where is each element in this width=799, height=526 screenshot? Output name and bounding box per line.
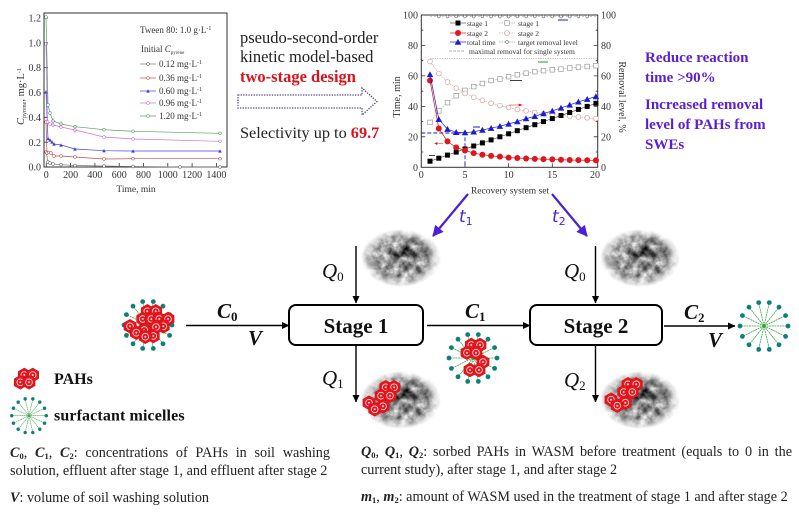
chart: pyrene concentration versus time: 0.4: [28, 113, 41, 124]
chart: pyrene concentration versus time: 1.20 mg·L: [159, 111, 197, 121]
chart: time and removal level versus recovery system set: target removal level: [518, 38, 578, 47]
chart: time and removal level versus recovery system set: 0: [413, 163, 418, 174]
chart: time and removal level versus recovery system set: 0: [601, 163, 606, 174]
legend: PAHs: PAHs: [54, 371, 93, 388]
flow labels: Q: [322, 366, 337, 390]
chart: pyrene concentration versus time: pyrene: [171, 51, 185, 56]
chart: pyrene concentration versus time: 1400: [206, 170, 226, 181]
image: sorbent with PAHs after stage 2: [600, 371, 680, 429]
chart: time and removal level versus recovery system set: Recovery system set: [471, 186, 549, 196]
text: two-stage design description: pseudo-second-order: [240, 28, 379, 47]
arrow: t1: [433, 194, 473, 236]
flow labels: 2: [579, 378, 586, 393]
chart: pyrene concentration versus time: -1: [17, 68, 23, 73]
flow labels: C: [465, 299, 479, 323]
chart: time and removal level versus recovery system set: 100: [403, 10, 418, 22]
chart: pyrene concentration versus time: 1.2: [28, 14, 41, 24]
chart: pyrene concentration versus time: 0.60 mg·L: [159, 86, 197, 96]
chart: pyrene concentration versus time: -1: [197, 112, 202, 118]
image: sorbent before stage 1: [361, 229, 441, 287]
text: definitions of Q: Q0, Q1, Q2: sorbed PAHs in WASM before treatment (equals to 0 in the current study), after stage 1, and after stage 2: [361, 444, 792, 478]
flow labels: V: [708, 328, 724, 352]
chart: time and removal level versus recovery system set: stage 1: [518, 19, 539, 28]
chart: time and removal level versus recovery system set: 5: [462, 170, 468, 181]
chart: time and removal level versus recovery system set: stage 2: [467, 29, 488, 38]
arrow: t2: [552, 194, 587, 236]
text: two-stage design description: [240, 28, 379, 142]
arrow: t1: t: [459, 207, 466, 227]
legend: surfactant micelles: surfactant micelles: [54, 408, 185, 424]
image: sorbent before stage 2: [600, 229, 680, 287]
chart: time and removal level versus recovery system set: 60: [601, 72, 611, 82]
chart: pyrene concentration versus time: 0.12 mg·L: [159, 59, 197, 69]
text: key results: time >90%: [645, 70, 716, 86]
chart: time and removal level versus recovery system set: 100: [601, 10, 616, 22]
box: Stage 2: Stage 2: [564, 314, 628, 338]
flow labels: Q: [564, 368, 579, 392]
legend: PAHs: [14, 368, 93, 389]
icon: clean micelle, final effluent: [738, 300, 790, 352]
chart: time and removal level versus recovery system set: 60: [408, 72, 418, 82]
flow labels: [217, 259, 724, 393]
chart: pyrene concentration versus time: Initial C: [141, 44, 171, 54]
chart: pyrene concentration versus time: 200: [63, 170, 78, 181]
chart: time and removal level versus recovery system set: 0: [419, 170, 424, 181]
text: two-stage design description: Selectivity up to 69.7: [240, 123, 379, 142]
flow labels: 1: [479, 309, 486, 324]
chart: pyrene concentration versus time: 400: [87, 170, 102, 181]
chart: pyrene concentration versus time: 0.0: [28, 162, 41, 174]
text: key results: [645, 50, 766, 153]
chart: pyrene concentration versus time: -1: [197, 99, 202, 105]
chart: time and removal level versus recovery system set: 80: [408, 41, 418, 52]
chart: pyrene concentration versus time: 0.2: [28, 138, 41, 149]
flow labels: C: [684, 300, 698, 324]
icon: micelle with remaining PAHs, stage 1 effluent: [447, 332, 499, 384]
flow labels: 2: [698, 310, 705, 325]
chart: pyrene concentration versus time: 1.0: [28, 38, 41, 50]
arrow: dotted block arrow: [238, 88, 377, 115]
text: definitions of C: C0, C1, C2: concentrations of PAHs in soil washing solution, effluent after stage 1, and effluent after stage 2: [10, 445, 330, 478]
chart: time and removal level versus recovery system set: 40: [408, 102, 418, 113]
text: two-stage design description: kinetic model-based: [240, 47, 374, 66]
flow labels: Q: [564, 259, 579, 283]
chart: time and removal level versus recovery system set: 20: [408, 132, 418, 144]
chart: pyrene concentration versus time: Time, min: [116, 185, 156, 195]
chart: pyrene concentration versus time: 0.36 mg·L: [159, 73, 197, 83]
flow labels: Q: [322, 259, 337, 283]
chart: pyrene concentration versus time: Tween 80: 1.0 g·L: [140, 25, 206, 35]
flow labels: 0: [337, 269, 344, 284]
chart: time and removal level versus recovery system set: Time, min: [392, 76, 403, 118]
chart: pyrene concentration versus time: 1200: [182, 170, 202, 181]
chart: pyrene concentration versus time: -1: [197, 74, 202, 80]
chart: pyrene concentration versus time: -1: [197, 60, 202, 66]
flow labels: C: [217, 299, 231, 323]
chart: time and removal level versus recovery system set: 20: [590, 170, 600, 181]
chart: time and removal level versus recovery system set: stage 2: [518, 29, 539, 38]
chart: pyrene concentration versus time: 0.8: [28, 63, 41, 74]
chart: time and removal level versus recovery system set: stage 1: [467, 19, 488, 28]
icon: micelle loaded with PAHs, influent: [122, 299, 174, 351]
chart: time and removal level versus recovery system set: 20: [601, 132, 611, 144]
chart: pyrene concentration versus time: -1: [206, 26, 211, 32]
text: definition of V: V: volume of soil washing solution: [10, 490, 209, 506]
arrow: t2: 2: [559, 215, 566, 228]
chart: pyrene concentration versus time: 0: [44, 170, 49, 181]
chart: time and removal level versus recovery system set: [392, 10, 627, 196]
chart: pyrene concentration versus time: -1: [197, 87, 202, 93]
text: definitions of m: m1, m2: amount of WASM used in the treatment of stage 1 and after stage 2: [361, 489, 788, 505]
flow labels: V: [248, 326, 264, 350]
chart: pyrene concentration versus time: 0.96 mg·L: [159, 98, 197, 108]
text: key results: level of PAHs from: [645, 117, 766, 133]
chart: pyrene concentration versus time: 1000: [158, 170, 178, 181]
chart: pyrene concentration versus time: C: [16, 117, 27, 125]
chart: pyrene concentration versus time: 600: [112, 170, 127, 181]
text: key results: Reduce reaction: [645, 50, 749, 66]
chart: time and removal level versus recovery system set: maximal removal for single system: [469, 47, 575, 56]
flow arrows: [186, 246, 735, 402]
box: Stage 1: [289, 305, 423, 345]
chart: pyrene concentration versus time: pyrene: [22, 101, 28, 118]
legend: surfactant micelles: [10, 397, 185, 434]
flow labels: 0: [579, 269, 586, 284]
chart: pyrene concentration versus time: , mg·L: [16, 73, 27, 102]
chart: pyrene concentration versus time: 0.6: [28, 88, 41, 99]
chart: pyrene concentration versus time: [16, 13, 227, 195]
text: key results: Increased removal: [645, 97, 763, 113]
chart: time and removal level versus recovery system set: 80: [601, 41, 611, 52]
flow labels: 1: [337, 376, 344, 391]
image: sorbent with PAHs after stage 1: [361, 371, 441, 429]
box: Stage 1: Stage 1: [324, 314, 388, 338]
chart: time and removal level versus recovery system set: 15: [547, 170, 557, 181]
flow labels: 0: [231, 309, 238, 324]
chart: time and removal level versus recovery system set: total time: [467, 38, 496, 47]
arrow: t1: 1: [466, 215, 473, 228]
box: Stage 2: [530, 305, 662, 345]
text: two-stage design description: two-stage design: [240, 67, 356, 86]
chart: time and removal level versus recovery system set: 10: [504, 170, 514, 181]
chart: pyrene concentration versus time: 800: [136, 170, 151, 181]
arrow: t2: t: [552, 207, 559, 227]
chart: time and removal level versus recovery system set: 40: [601, 102, 611, 113]
text: key results: SWEs: [645, 137, 684, 153]
chart: time and removal level versus recovery system set: Removal level, %: [616, 61, 627, 133]
